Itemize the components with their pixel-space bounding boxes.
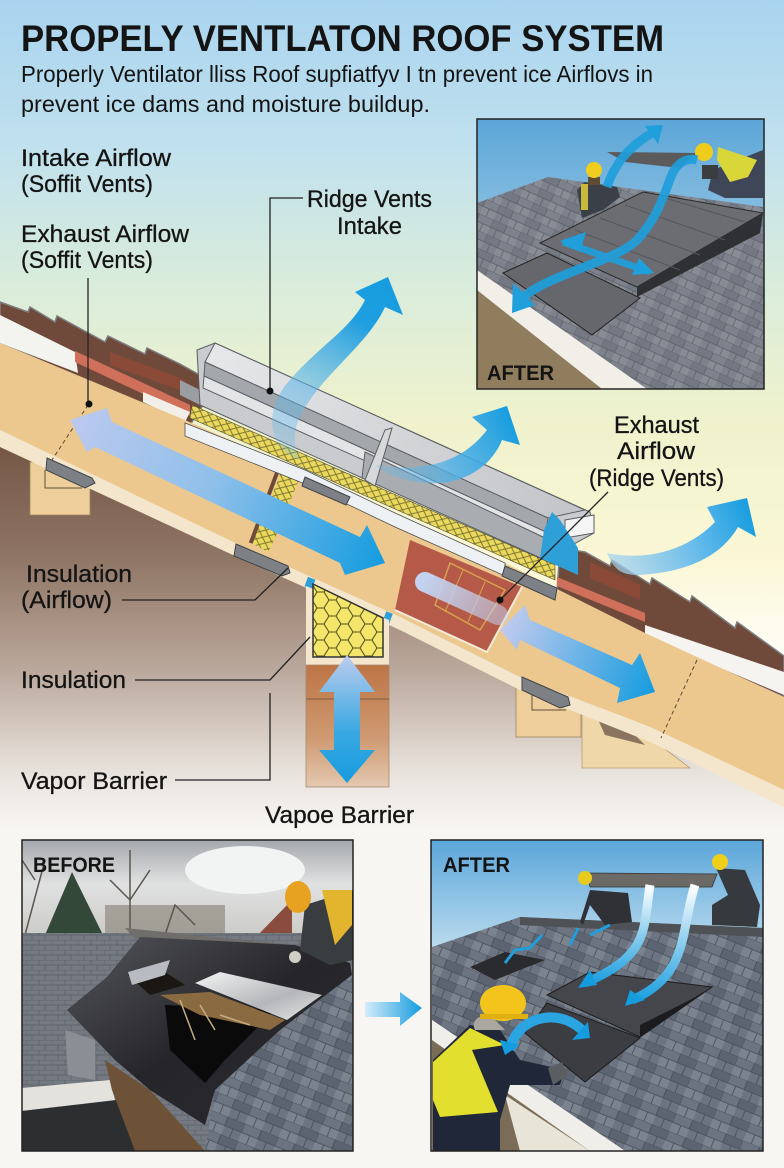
label: insulation bbox=[21, 637, 310, 694]
label: exhaust airflow soffit: Exhaust Airflow bbox=[21, 221, 190, 248]
ground shaded area under roof bbox=[0, 440, 784, 1168]
arrow: exhaust curve centre bbox=[375, 406, 520, 483]
after label top: AFTER bbox=[487, 362, 554, 385]
front worker bbox=[433, 985, 568, 1151]
ridge cap bbox=[125, 928, 288, 944]
lower fascia strip bbox=[0, 430, 784, 807]
label: exhaust airflow soffit bbox=[21, 221, 190, 274]
leader: exhaust ridge vents bbox=[496, 492, 608, 604]
arrow: vertical double bbox=[319, 655, 375, 783]
label: exhaust airflow ridge vents bbox=[589, 412, 724, 492]
worker bbox=[285, 881, 353, 965]
subtitle bbox=[21, 61, 653, 117]
arrow: exhaust curve right bbox=[607, 498, 756, 575]
central wall column bbox=[306, 584, 389, 787]
leader: exhaust airflow soffit bbox=[86, 278, 92, 408]
ridge vent bbox=[197, 343, 594, 560]
label: exhaust airflow ridge vents: Exhaust bbox=[614, 412, 699, 439]
label: ridge vents intake: Ridge Vents bbox=[307, 186, 432, 213]
upper vent panel bbox=[540, 192, 763, 287]
arrow: intake curve up bbox=[272, 277, 403, 460]
subtitle: prevent ice dams and moisture buildup. bbox=[21, 91, 430, 117]
top right worker bbox=[712, 854, 760, 927]
left worker bbox=[577, 162, 620, 218]
pale airflow pill bbox=[425, 582, 498, 615]
title: PROPELY VENTLATON ROOF SYSTEM bbox=[21, 18, 664, 59]
insulation strips in wall bbox=[250, 470, 300, 552]
small wiggle arrows bbox=[505, 925, 610, 963]
label: ridge vents intake bbox=[307, 186, 432, 240]
upper roof shingle layers bbox=[0, 302, 784, 697]
rafter band bbox=[0, 343, 784, 790]
frame top photo bbox=[477, 119, 764, 389]
roof cross-section diagram bbox=[0, 277, 784, 807]
arrow: before to after bbox=[365, 992, 422, 1026]
silver flashing bbox=[195, 972, 322, 1020]
label: insulation airflow: (Airflow) bbox=[21, 587, 112, 614]
dashed rafter cuts bbox=[52, 405, 697, 738]
frame before photo bbox=[22, 840, 353, 1151]
label: insulation airflow bbox=[21, 561, 288, 614]
label: intake airflow: Intake Airflow bbox=[21, 145, 172, 172]
small vent bbox=[470, 952, 545, 980]
frame bottom after photo bbox=[431, 840, 763, 1151]
label: exhaust airflow soffit: (Soffit Vents) bbox=[21, 247, 153, 274]
leader: ridge vents bbox=[266, 198, 303, 394]
left shingle roof bbox=[22, 933, 353, 1151]
label: vapor barrier bbox=[21, 693, 270, 795]
photo panel: before bbox=[22, 840, 353, 1151]
shingle roof bbox=[432, 917, 763, 1151]
red wall block bbox=[395, 540, 522, 652]
photo panel: top after bbox=[477, 119, 764, 389]
soffit boxes bbox=[30, 462, 690, 768]
label: vapoe barrier: Vapoe Barrier bbox=[265, 802, 414, 829]
ridge piece bbox=[607, 152, 697, 168]
yellow insulation strip bbox=[190, 405, 555, 580]
top left worker bbox=[578, 871, 632, 925]
label: intake airflow: (Soffit Vents) bbox=[21, 171, 153, 198]
gutter and wall bbox=[432, 1020, 625, 1151]
right worker bbox=[695, 143, 763, 198]
curved blue arrow bbox=[510, 1017, 582, 1050]
after label bottom: AFTER bbox=[443, 854, 510, 877]
photo panel: bottom after bbox=[431, 840, 763, 1151]
yellow insulation block bbox=[313, 584, 383, 657]
page bottom strip bbox=[0, 830, 784, 1168]
label: vapor barrier: Vapor Barrier bbox=[21, 768, 167, 795]
blue ridge opening bbox=[540, 512, 578, 575]
damage hole bbox=[165, 1005, 275, 1083]
wall and fascia bbox=[22, 1030, 205, 1151]
before label: BEFORE bbox=[33, 854, 115, 877]
label: intake airflow bbox=[21, 145, 172, 198]
label: exhaust airflow ridge vents: Airflow bbox=[617, 438, 696, 465]
large vent panels bbox=[547, 972, 712, 1037]
label: insulation: Insulation bbox=[21, 667, 126, 694]
subtitle: Properly Ventilator lliss Roof supfiatfyv I tn prevent ice Airflovs in bbox=[21, 61, 653, 87]
black membrane bbox=[67, 937, 352, 1125]
arrow: main rafter airflow bbox=[70, 408, 385, 575]
lower vent panel bbox=[503, 253, 640, 335]
label: ridge vents intake: Intake bbox=[337, 213, 402, 240]
label: exhaust airflow ridge vents: (Ridge Vents) bbox=[589, 465, 724, 492]
white flashing strip bbox=[185, 423, 505, 576]
small blue clips bbox=[305, 577, 393, 625]
arrow: lower rafter airflow bbox=[500, 605, 655, 703]
white airflow streams bbox=[585, 885, 695, 1000]
vent slots bbox=[46, 458, 570, 708]
label: insulation airflow: Insulation bbox=[26, 561, 132, 588]
airflow arrows bbox=[520, 133, 697, 300]
right shingle roof bbox=[205, 975, 353, 1151]
ridge bar bbox=[587, 873, 717, 887]
trees bbox=[22, 850, 292, 933]
